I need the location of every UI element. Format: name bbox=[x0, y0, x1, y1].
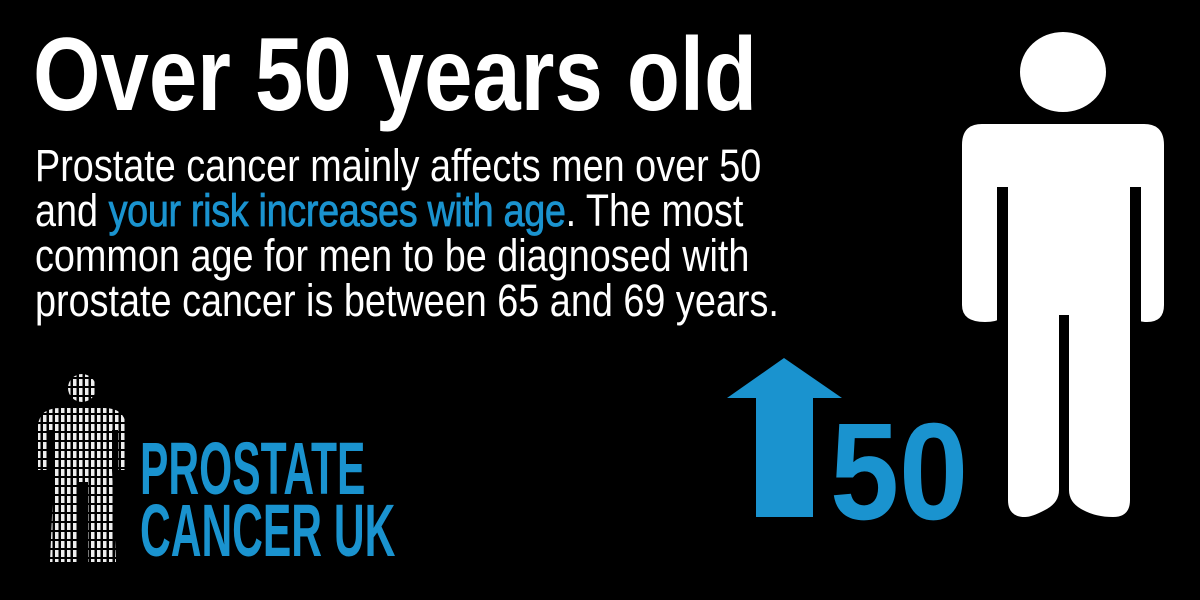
body text bbox=[35, 140, 779, 326]
logo bbox=[38, 374, 395, 572]
logo text: CANCER UK bbox=[140, 489, 395, 572]
logo text: PROSTATE bbox=[140, 427, 365, 510]
body text: prostate cancer is between 65 and 69 years. bbox=[35, 275, 779, 326]
icon: logo figure bbox=[38, 374, 124, 562]
body text: common age for men to be diagnosed with bbox=[35, 230, 749, 281]
number 50: 50 bbox=[830, 395, 968, 549]
logo text bbox=[140, 427, 395, 572]
title: Over 50 years old bbox=[33, 17, 757, 133]
body text: and your risk increases with age. The most bbox=[35, 185, 743, 236]
body text: Prostate cancer mainly affects men over 50 bbox=[35, 140, 761, 191]
